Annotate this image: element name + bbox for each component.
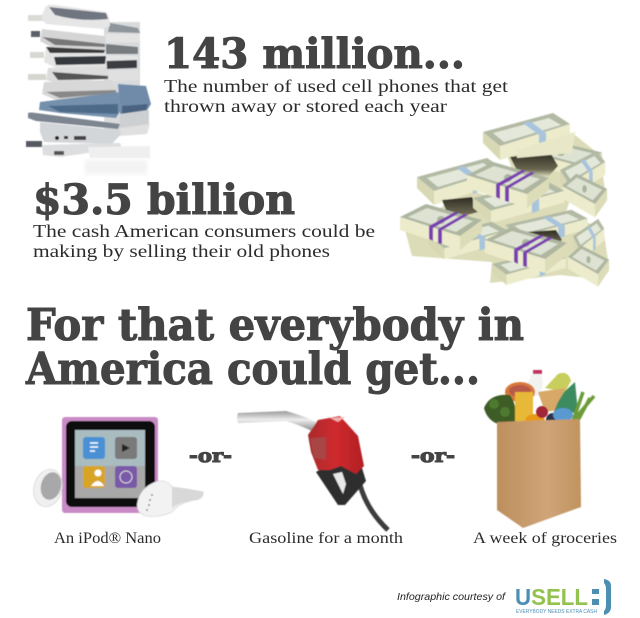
icon: playlist app [83, 437, 105, 459]
icon: genius app [115, 466, 137, 488]
icon: left earbud [30, 466, 66, 510]
cash silhouette fill [405, 135, 608, 283]
icon: grocery bag [484, 370, 594, 528]
handle [308, 416, 364, 474]
back phone stack [104, 22, 151, 136]
captions [54, 530, 617, 547]
heading: 143 million: 143 million... [164, 30, 465, 78]
icon: stack of old phones [26, 5, 151, 158]
hose [360, 485, 388, 530]
text: or 2: -or- [411, 445, 455, 467]
heading: for that everybody [25, 300, 524, 395]
heading: for that everybody: America could get... [25, 344, 480, 395]
text: cash description: The cash American consumers could be [33, 221, 375, 241]
text: used phones description: The number of used cell phones that get [164, 76, 508, 96]
icon: right earbud [137, 481, 203, 516]
icon: gas nozzle [237, 411, 388, 530]
logo: uSell: EVERYBODY NEEDS EXTRA CASH [516, 609, 597, 615]
bag [497, 419, 581, 528]
heading: for that everybody: For that everybody in [26, 300, 524, 351]
icon: iPod nano with earbuds [30, 417, 203, 516]
icon: artists app [83, 466, 105, 488]
text: used phones description: thrown away or stored each year [164, 96, 447, 116]
text: or 1: -or- [189, 445, 232, 467]
groceries [484, 370, 594, 428]
spout [237, 411, 320, 433]
text: cash description: making by selling their old phones [33, 241, 330, 261]
logo: uSell: USELL [515, 584, 588, 610]
heading: 3.5 billion: $3.5 billion [33, 176, 295, 224]
caption: iPod: An iPod® Nano [54, 530, 161, 547]
icon: phone reflection [85, 160, 147, 174]
logo: uSell [515, 579, 611, 615]
front phone stack [26, 5, 150, 158]
icon: pile of cash [400, 113, 609, 287]
text: cash description [33, 221, 375, 261]
guard [316, 464, 366, 505]
icon: now playing app [115, 437, 137, 459]
footer credit: Infographic courtesy of [397, 591, 506, 603]
caption: groceries: A week of groceries [473, 530, 617, 547]
text: used phones description [164, 76, 508, 116]
caption: gasoline: Gasoline for a month [249, 530, 403, 547]
